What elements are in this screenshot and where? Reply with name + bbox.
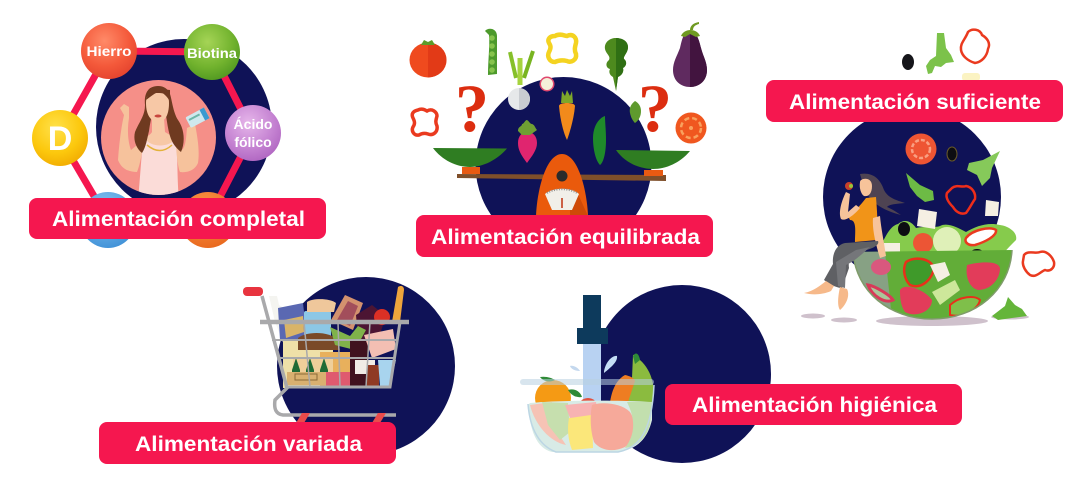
- salad bowl: [853, 250, 1012, 319]
- scale right pan: [616, 150, 690, 169]
- icon: arugula leaf: [605, 38, 628, 91]
- icon: red pepper ring: [947, 186, 975, 214]
- icon: pepper ring right: [1023, 252, 1054, 276]
- icon: small leaf: [630, 101, 641, 123]
- water splashes: [570, 356, 617, 373]
- sphere: biotina: Biotina: [187, 45, 237, 61]
- sphere: orange: [180, 192, 236, 248]
- icon: beet: [518, 120, 537, 163]
- icon: falling leaf: [906, 173, 934, 202]
- icon: tomato slice: [676, 112, 706, 144]
- scale beam: [457, 174, 666, 181]
- panel: alimentación variada: [99, 277, 455, 464]
- icon: cucumber: [593, 116, 606, 165]
- panel: alimentación suficiente: [766, 30, 1063, 326]
- woman sitting: [804, 174, 905, 310]
- icon: radish slice: [540, 76, 554, 92]
- icon: lettuce: [967, 151, 1000, 186]
- icon: yellow pepper ring: [548, 35, 576, 62]
- sphere: vitamin D: [32, 110, 88, 166]
- vitamin hexagon connector: [60, 51, 253, 220]
- sphere: vitamin D: D: [48, 120, 72, 158]
- cart wheels: [296, 413, 386, 423]
- panel: alimentación equilibrada: [410, 22, 713, 257]
- label: alimentación variada: Alimentación variada: [135, 432, 363, 456]
- background circle: [96, 39, 272, 215]
- bowl and produce: [520, 353, 654, 452]
- icon: black olive: [947, 147, 957, 161]
- sphere: ácido fólico: Ácido: [234, 116, 272, 132]
- icon: cheese cube: [985, 200, 999, 216]
- icon: olive top: [902, 54, 914, 70]
- sphere: biotina: [184, 24, 240, 80]
- shopping cart frame: [260, 296, 409, 415]
- icon: lettuce top: [926, 33, 954, 74]
- sphere: blue: [80, 192, 136, 248]
- water stream: [583, 344, 601, 404]
- background circle: [476, 77, 652, 253]
- icon: tomato slice: [906, 134, 936, 164]
- icon: question mark right: ?: [638, 70, 672, 146]
- icon: eggplant: [673, 22, 707, 87]
- salad top: [880, 209, 1016, 259]
- faucet: [577, 295, 608, 344]
- icon: carrot: [559, 90, 575, 140]
- label: alimentación suficiente: [766, 80, 1063, 122]
- panel: alimentación higiénica: [520, 285, 962, 463]
- icon: leek: [508, 51, 533, 110]
- label: alimentación higiénica: [665, 384, 962, 425]
- label: alimentación equilibrada: [416, 215, 713, 257]
- background circle: [823, 108, 1001, 286]
- sphere: hierro: Hierro: [86, 43, 132, 59]
- shopping cart groceries: [269, 286, 404, 388]
- label: alimentación completal: Alimentación completal: [52, 207, 305, 231]
- sphere: hierro: [81, 23, 137, 79]
- woman portrait: [101, 80, 216, 200]
- sphere: ácido fólico: [225, 105, 281, 161]
- panel: alimentación completa: [29, 23, 326, 248]
- background circle: [593, 285, 771, 463]
- pale pepper piece: [962, 73, 980, 81]
- label: alimentación variada: [99, 422, 396, 464]
- icon: tomato: [410, 40, 446, 78]
- label: alimentación suficiente: Alimentación suficiente: [789, 90, 1041, 114]
- icon: pepper ring top: [961, 30, 989, 63]
- bowl shadows: [801, 314, 1029, 326]
- label: alimentación higiénica: Alimentación higiénica: [692, 393, 938, 417]
- icon: red pepper ring: [412, 109, 437, 135]
- cart handle: [243, 287, 263, 296]
- scale supports: [462, 167, 663, 176]
- sphere: ácido fólico: fólico: [234, 134, 272, 150]
- label: alimentación completal: [29, 198, 326, 239]
- icon: pea pod: [485, 29, 497, 75]
- label: alimentación equilibrada: Alimentación equilibrada: [431, 225, 701, 249]
- background circle: [277, 277, 455, 455]
- scale left pan: [433, 148, 507, 167]
- icon: lettuce bottom: [992, 297, 1027, 320]
- scale body: [536, 154, 588, 216]
- icon: question mark left: ?: [455, 70, 489, 146]
